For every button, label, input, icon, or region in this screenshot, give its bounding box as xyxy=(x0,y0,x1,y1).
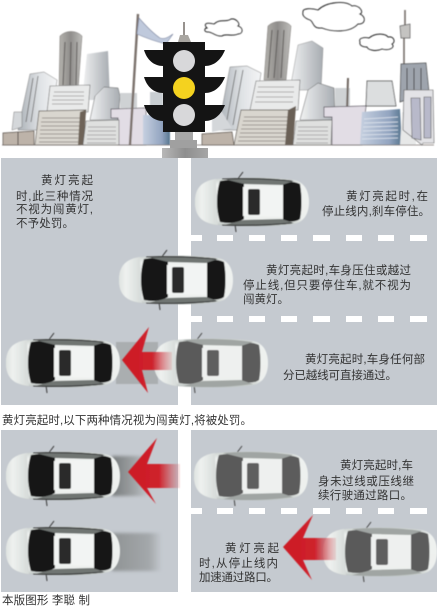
city skyline illustration xyxy=(2,3,434,145)
traffic light xyxy=(144,22,225,158)
text: not counted as running the light: 黄灯亮起 xyxy=(41,173,94,187)
text: car on line: 停止线,但只要停住车,就不视为 xyxy=(243,278,411,292)
car: crossing xyxy=(6,333,120,393)
text: car stopped inside line: 黄灯亮起时,在 xyxy=(346,189,428,203)
car: ghost position past the line xyxy=(154,333,268,393)
panel: top scenarios xyxy=(1,158,437,405)
flag on pole xyxy=(130,14,173,145)
text: not counted as running the light: 不予处罚。 xyxy=(16,217,74,230)
car: stopped inside line xyxy=(195,172,309,232)
panel: violation scenarios xyxy=(1,430,437,592)
text: not past line and continues: 黄灯亮起时,车 xyxy=(340,458,413,472)
car: grey, lower right xyxy=(323,522,437,582)
text: accelerate through xyxy=(199,541,280,584)
car: grey, upper right xyxy=(194,446,308,506)
car: accelerating with motion blur xyxy=(6,521,120,581)
text: car on line: 闯黄灯。 xyxy=(243,292,289,306)
text: not counted as running the light: 时,此三种情况 xyxy=(16,189,94,203)
clouds xyxy=(205,3,394,50)
arrow: red left upper xyxy=(128,438,180,504)
text: car on line: 黄灯亮起时,车身压住或越过 xyxy=(266,263,412,277)
text: car on line xyxy=(243,263,412,306)
text: not past line and continues: 身未过线或压线继 xyxy=(318,474,414,488)
text: not counted as running the light: 不视为闯黄灯, xyxy=(16,202,93,216)
arrow: red left lower xyxy=(283,515,336,580)
text: not counted as running the light xyxy=(16,173,94,230)
text: already crossed: 分已越线可直接通过。 xyxy=(283,368,397,382)
text: already crossed: 黄灯亮起时,车身任何部 xyxy=(305,352,425,366)
car: stopped on line xyxy=(119,250,233,310)
text: accelerate through: 加速通过路口。 xyxy=(199,570,278,584)
text: already crossed xyxy=(283,352,425,382)
text: not past line and continues xyxy=(318,458,414,502)
arrow: red left xyxy=(122,327,172,393)
text: accelerate through: 时,从停止线内 xyxy=(199,556,278,570)
text: accelerate through: 黄灯亮起 xyxy=(225,541,280,555)
heading: two violations: 黄灯亮起时,以下两种情况视为闯黄灯,将被处罚。 xyxy=(2,413,252,427)
text: car stopped inside line: 停止线内,刹车停住。 xyxy=(322,204,430,218)
car: running light, upper xyxy=(6,446,120,506)
text: not past line and continues: 续行驶通过路口。 xyxy=(318,488,412,502)
text: car stopped inside line xyxy=(322,189,430,218)
